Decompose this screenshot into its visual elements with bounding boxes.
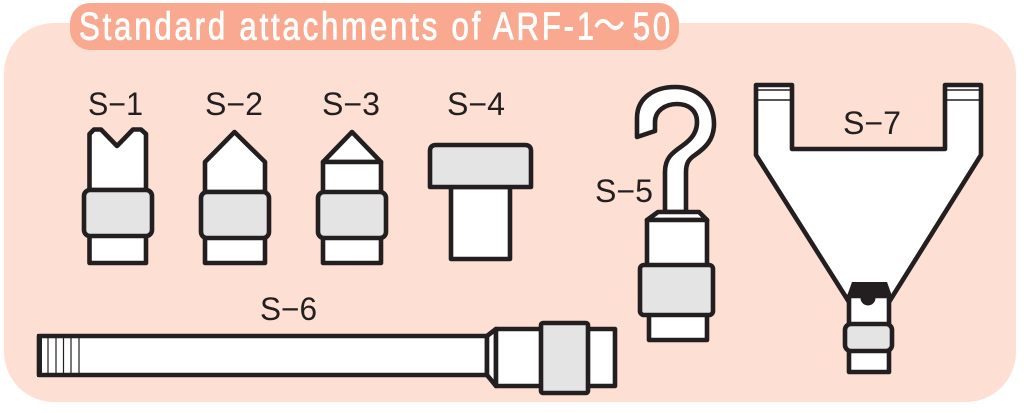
attachment S-6 <box>37 291 615 393</box>
title banner: 50 <box>633 5 673 48</box>
fork <box>756 85 981 302</box>
S-3 tip <box>323 132 381 162</box>
S-5 hook <box>637 87 714 212</box>
label S-6: S−6 <box>260 291 317 327</box>
attachment S-5 <box>595 87 714 340</box>
S-1 lower shank <box>90 232 146 263</box>
S-7 pin <box>860 290 876 306</box>
S-2 lower shank <box>205 234 265 263</box>
attachment S-2 <box>201 86 269 263</box>
S-6 thread lines <box>48 336 79 375</box>
label S-1: S−1 <box>88 86 143 122</box>
S-2 pointed body <box>205 132 265 192</box>
title banner: 〜 <box>594 5 628 48</box>
attachment S-7 <box>756 85 981 372</box>
label S-5: S−5 <box>595 173 653 209</box>
label S-4: S−4 <box>447 86 505 122</box>
S-1 grey band <box>84 190 152 236</box>
S-1 body <box>90 130 146 190</box>
S-6 grey band <box>541 323 588 393</box>
S-5 body <box>647 220 707 266</box>
S-5 grey band <box>640 265 713 315</box>
S-4 stem <box>451 187 510 259</box>
S-6 threaded rod <box>39 336 487 375</box>
S-7 black head <box>847 282 892 296</box>
S-6 body <box>496 329 615 386</box>
S-5 lower shank <box>649 312 707 340</box>
S-7 lower shank <box>849 348 889 372</box>
S-3 lower shank <box>323 234 381 263</box>
S-4 grey cap <box>430 145 531 187</box>
S-6 chamfer <box>487 329 496 386</box>
S-5 collar <box>647 212 707 220</box>
attachment S-1 <box>84 86 152 263</box>
title banner: Standard attachments of ARF-1 <box>79 5 597 48</box>
attachment S-4 <box>430 86 531 259</box>
S-3 grey band <box>318 192 386 238</box>
label S-3: S−3 <box>322 86 380 122</box>
label S-7: S−7 <box>843 105 901 141</box>
fork tip lines <box>757 90 980 100</box>
label S-2: S−2 <box>205 86 263 122</box>
S-7 neck <box>849 296 889 326</box>
attachment S-3 <box>318 86 386 263</box>
S-7 grey band <box>845 324 892 351</box>
S-3 body <box>323 162 381 194</box>
S-2 grey band <box>201 192 269 238</box>
